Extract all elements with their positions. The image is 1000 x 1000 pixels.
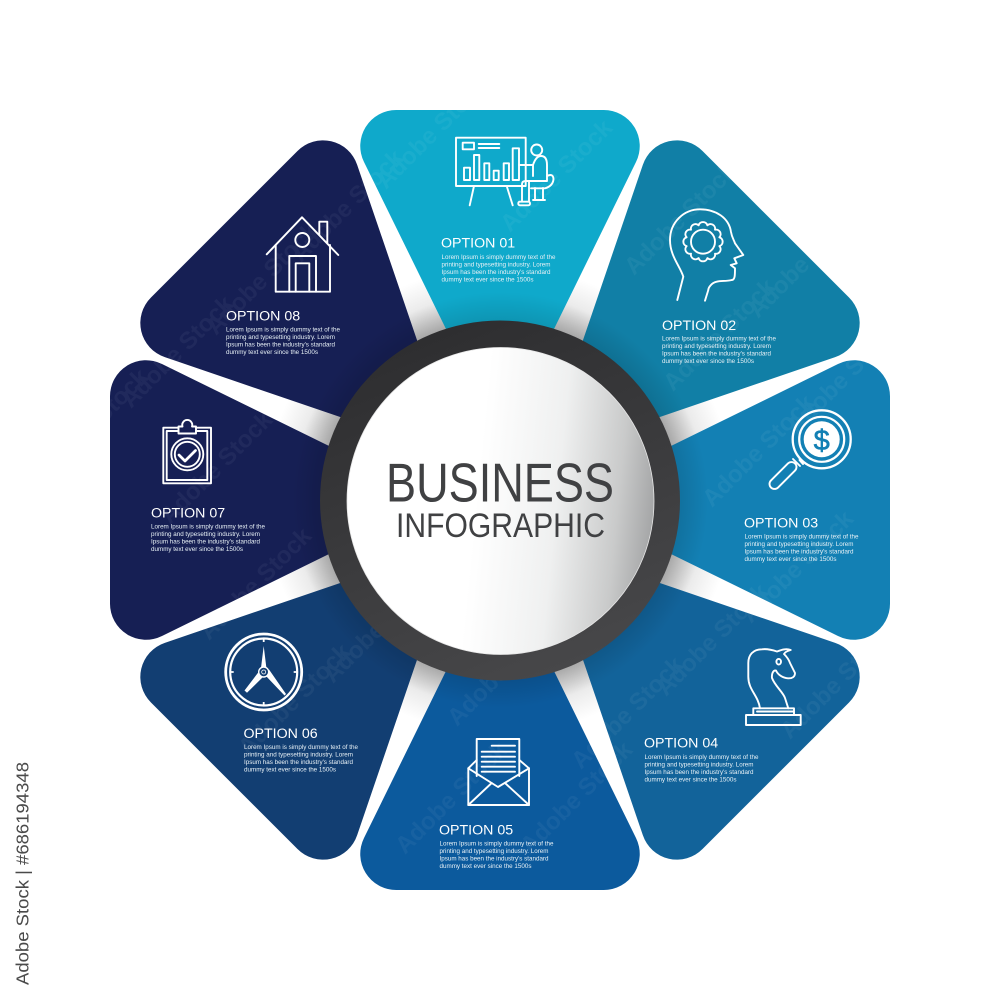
icon: clock	[226, 634, 302, 710]
icon: magnifier with dollar: $	[814, 425, 830, 457]
text: option 01 description: printing and typesetting industry. Lorem	[442, 262, 550, 268]
watermark: Adobe Stock	[116, 290, 239, 413]
watermark: Adobe Stock	[697, 389, 820, 512]
wedge 08	[125, 125, 556, 556]
text: option 02 description: printing and typesetting industry. Lorem	[662, 343, 771, 350]
text: option 04 description: dummy text ever since the 1500s	[644, 776, 736, 783]
text: option 05 description: Lorem Ipsum is simply dummy text of the	[440, 840, 554, 848]
dark ring	[320, 320, 680, 680]
text: option 02 description: dummy text ever since the 1500s	[662, 358, 754, 365]
stock credit: Adobe Stock | #686194348	[12, 762, 32, 985]
panel: option 02	[444, 125, 875, 556]
text: option 06 description: dummy text ever since the 1500s	[244, 766, 336, 774]
icon: magnifier with dollar	[767, 410, 851, 491]
text: option 06 description	[244, 744, 358, 774]
icon: clipboard with check	[163, 420, 211, 483]
watermark: Adobe Stock	[286, 144, 409, 267]
panel: option 07	[110, 360, 439, 640]
panel: option 08	[125, 125, 556, 556]
panel: option 04	[444, 444, 875, 875]
icon: chess knight	[746, 649, 801, 725]
text: option 01 description: dummy text ever since the 1500s	[442, 276, 534, 284]
wedge 01	[360, 110, 640, 439]
text: option 08 description	[226, 326, 340, 356]
heading: option 03: OPTION 03	[744, 516, 818, 532]
white disc	[347, 348, 654, 654]
text: option 05 description: Ipsum has been the industry's standard	[440, 856, 549, 862]
wedge 02	[444, 125, 875, 556]
text: option 08 description: dummy text ever since the 1500s	[226, 349, 318, 356]
watermark: Adobe Stock	[77, 174, 200, 297]
watermark: Adobe Stock	[371, 71, 494, 194]
text: option 08 description: Lorem Ipsum is simply dummy text of the	[226, 326, 340, 334]
wedge 07	[110, 360, 439, 640]
text: option 05 description: printing and typesetting industry. Lorem	[440, 848, 548, 855]
watermark: Adobe Stock	[318, 565, 441, 688]
wedge 06	[125, 444, 556, 875]
text: option 03 description: Lorem Ipsum is simply dummy text of the	[744, 534, 859, 540]
text: option 07 description: Lorem Ipsum is simply dummy text of the	[151, 524, 265, 530]
text: option 02 description	[662, 336, 776, 365]
text: option 06 description: Lorem Ipsum is simply dummy text of the	[244, 744, 358, 751]
text: option 07 description: printing and typesetting industry. Lorem	[151, 531, 260, 538]
watermark: Adobe Stock	[390, 736, 513, 859]
panel: option 06	[125, 444, 556, 875]
icon: presentation board	[456, 138, 554, 205]
gap shadow	[265, 265, 735, 735]
text: option 05 description	[440, 840, 554, 870]
watermark: Adobe Stock	[233, 638, 356, 761]
watermark: Adobe Stock	[442, 608, 565, 731]
text: option 08 description: printing and typesetting industry. Lorem	[226, 334, 335, 341]
watermark	[31, 71, 905, 859]
heading: option 02: OPTION 02	[662, 318, 736, 334]
watermark: Adobe Stock	[201, 217, 324, 340]
icon: envelope with letter	[468, 739, 529, 805]
panel: option 01	[360, 110, 640, 439]
text: option 03 description: printing and typesetting industry. Lorem	[744, 541, 854, 548]
heading: option 08: OPTION 08	[226, 309, 300, 325]
text: option 02 description: Ipsum has been the industry's standard	[662, 350, 771, 358]
watermark: Adobe Stock	[782, 316, 905, 439]
wedge 03	[561, 360, 890, 640]
wedge 04	[444, 444, 875, 875]
text: option 01 description	[442, 254, 556, 284]
watermark: Adobe Stock	[619, 157, 742, 280]
heading: option 01: OPTION 01	[441, 236, 515, 252]
heading: option 06: OPTION 06	[244, 726, 318, 742]
watermark: Adobe Stock	[155, 406, 278, 529]
heading: option 07: OPTION 07	[151, 506, 225, 522]
text: option 04 description	[644, 754, 759, 783]
text: option 04 description: printing and typesetting industry. Lorem	[644, 761, 754, 768]
text: option 01 description: Lorem Ipsum is simply dummy text of the	[442, 254, 556, 261]
subtitle: infographic: INFOGRAPHIC	[396, 507, 605, 545]
centre shadow over wedges	[292, 292, 708, 708]
text: option 06 description: printing and typesetting industry. Lorem	[244, 752, 353, 758]
centre hub	[320, 320, 680, 680]
watermark: Adobe Stock	[775, 621, 898, 744]
text: option 04 description: Ipsum has been the industry's standard	[644, 769, 754, 776]
watermark: Adobe Stock	[31, 363, 154, 486]
icon: head with gear	[670, 209, 743, 301]
text: option 06 description: Ipsum has been the industry's standard	[244, 759, 353, 766]
watermark: Adobe Stock	[194, 522, 317, 645]
heading: option 05: OPTION 05	[439, 822, 513, 838]
watermark: Adobe Stock	[743, 200, 866, 323]
text: option 04 description: Lorem Ipsum is simply dummy text of the	[644, 754, 759, 761]
text: option 05 description: dummy text ever since the 1500s	[440, 863, 532, 870]
text: option 07 description	[151, 524, 265, 553]
text: option 03 description: Ipsum has been the industry's standard	[744, 548, 854, 556]
watermark: Adobe Stock	[162, 101, 285, 224]
icon: house	[267, 217, 338, 292]
watermark: Adobe Stock	[495, 114, 618, 237]
panel: option 05	[360, 561, 640, 890]
watermark: Adobe Stock	[566, 651, 689, 774]
panel: option 03	[561, 360, 890, 640]
text: option 03 description	[744, 534, 859, 563]
wedge 05	[360, 561, 640, 890]
text: option 08 description: Ipsum has been the industry's standard	[226, 342, 335, 348]
text: option 03 description: dummy text ever since the 1500s	[744, 556, 836, 563]
title: business: BUSINESS	[386, 452, 614, 514]
watermark: Adobe Stock	[658, 273, 781, 396]
heading: option 04: OPTION 04	[644, 736, 718, 752]
text: option 07 description: dummy text ever since the 1500s	[151, 546, 243, 553]
text: option 07 description: Ipsum has been the industry's standard	[151, 538, 260, 546]
text: option 01 description: Ipsum has been the industry's standard	[442, 269, 551, 276]
watermark: Adobe Stock	[515, 736, 638, 859]
watermark: Adobe Stock	[651, 578, 774, 701]
watermark: Adobe Stock	[736, 505, 859, 628]
text: option 02 description: Lorem Ipsum is simply dummy text of the	[662, 336, 776, 342]
